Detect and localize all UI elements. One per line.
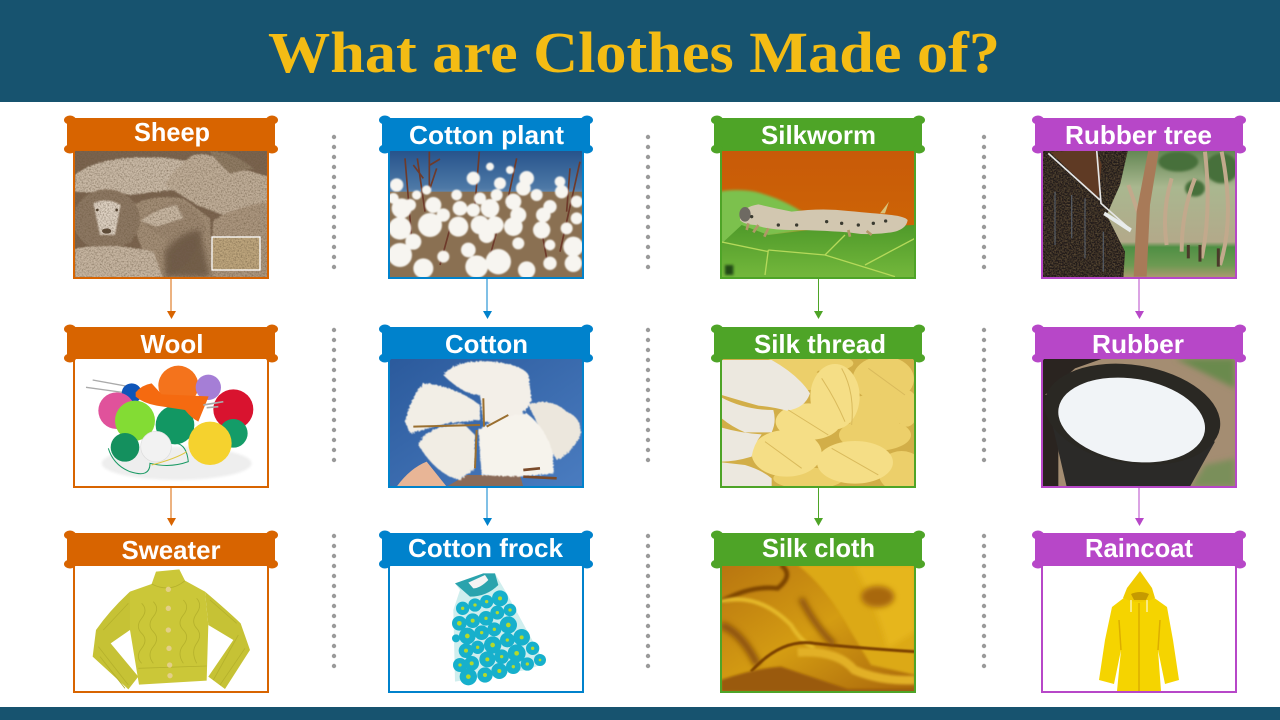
banner: Raincoat: Raincoat bbox=[1085, 533, 1193, 563]
banner: Sheep bbox=[64, 116, 278, 154]
banner: Cotton frock: Cotton frock bbox=[408, 533, 564, 563]
card: silkworm bbox=[711, 116, 925, 278]
footer band bbox=[0, 707, 1280, 720]
column: sheep to sweater bbox=[64, 116, 278, 692]
frame bbox=[721, 150, 915, 278]
card: wool bbox=[64, 324, 278, 487]
image: rubber tree bbox=[1042, 148, 1238, 278]
frame bbox=[389, 565, 583, 692]
banner: Silkworm bbox=[711, 116, 925, 154]
banner: Wool bbox=[64, 324, 278, 362]
image: silkworm on leaf bbox=[720, 148, 917, 278]
card: rubber bbox=[1032, 324, 1246, 487]
arrow: rubber tree to rubber bbox=[1135, 278, 1144, 319]
frame bbox=[74, 150, 268, 278]
image: raincoat bbox=[1099, 571, 1179, 691]
banner: Rubber bbox=[1032, 324, 1246, 362]
card: cotton plant bbox=[379, 116, 593, 279]
arrow: cotton to frock bbox=[483, 487, 492, 526]
card: sweater bbox=[64, 530, 278, 692]
arrow: rubber to raincoat bbox=[1135, 487, 1144, 526]
column: cotton plant to frock bbox=[379, 116, 593, 692]
banner: Silk cloth bbox=[711, 530, 925, 568]
banner: Rubber tree bbox=[1032, 116, 1246, 154]
frame bbox=[74, 358, 268, 487]
arrow: cotton plant to cotton bbox=[483, 278, 492, 319]
card: raincoat bbox=[1032, 530, 1246, 692]
arrow: sheep to wool bbox=[167, 278, 176, 319]
banner: Wool: Wool bbox=[140, 329, 204, 359]
banner: Cotton plant bbox=[379, 116, 593, 154]
arrow: thread to cloth bbox=[814, 487, 823, 526]
frame bbox=[721, 358, 915, 487]
dotted column dividers bbox=[334, 137, 984, 667]
image: silk cloth bbox=[721, 565, 915, 692]
card: rubber tree bbox=[1032, 116, 1246, 278]
card: frock bbox=[379, 530, 593, 692]
banner: Silk cloth: Silk cloth bbox=[762, 533, 875, 563]
card: cotton bbox=[379, 324, 593, 487]
banner: Sweater bbox=[64, 530, 278, 568]
banner: Cotton bbox=[379, 324, 593, 362]
image: cotton field bbox=[387, 148, 587, 279]
image: frock bbox=[452, 573, 546, 685]
title: What are Clothes Made of? bbox=[268, 20, 1000, 85]
banner: Cotton: Cotton bbox=[445, 329, 528, 359]
banner: Sheep: Sheep bbox=[134, 117, 210, 147]
frame bbox=[1042, 150, 1236, 278]
frame bbox=[721, 565, 915, 692]
banner: Cotton plant: Cotton plant bbox=[409, 120, 564, 150]
column: rubber tree to raincoat bbox=[1032, 116, 1246, 692]
image: wool balls bbox=[86, 366, 254, 480]
image: cotton boll bbox=[389, 358, 583, 487]
banner: Sweater: Sweater bbox=[122, 535, 220, 565]
arrow: silkworm to thread bbox=[814, 278, 823, 319]
column: silkworm to silk cloth bbox=[711, 116, 925, 692]
card: silk thread bbox=[711, 324, 925, 492]
frame bbox=[1042, 565, 1236, 692]
arrow: wool to sweater bbox=[167, 487, 176, 526]
frame bbox=[389, 150, 583, 278]
banner: Cotton frock bbox=[379, 530, 593, 568]
frame bbox=[74, 565, 268, 692]
image: sheep bbox=[75, 151, 267, 277]
header band bbox=[0, 0, 1280, 102]
frame bbox=[1042, 358, 1236, 487]
card: silk cloth bbox=[711, 530, 925, 692]
image: latex bucket bbox=[1037, 352, 1236, 487]
banner: Silk thread bbox=[711, 324, 925, 362]
image: silk thread bbox=[722, 359, 914, 486]
banner: Rubber tree: Rubber tree bbox=[1065, 120, 1212, 150]
banner: Rubber: Rubber bbox=[1092, 329, 1184, 359]
banner: Raincoat bbox=[1032, 530, 1246, 568]
frame bbox=[389, 358, 583, 487]
banner: Silkworm: Silkworm bbox=[761, 120, 876, 150]
image: sweater bbox=[93, 569, 250, 689]
card: sheep bbox=[64, 116, 278, 282]
banner: Silk thread: Silk thread bbox=[754, 329, 886, 359]
